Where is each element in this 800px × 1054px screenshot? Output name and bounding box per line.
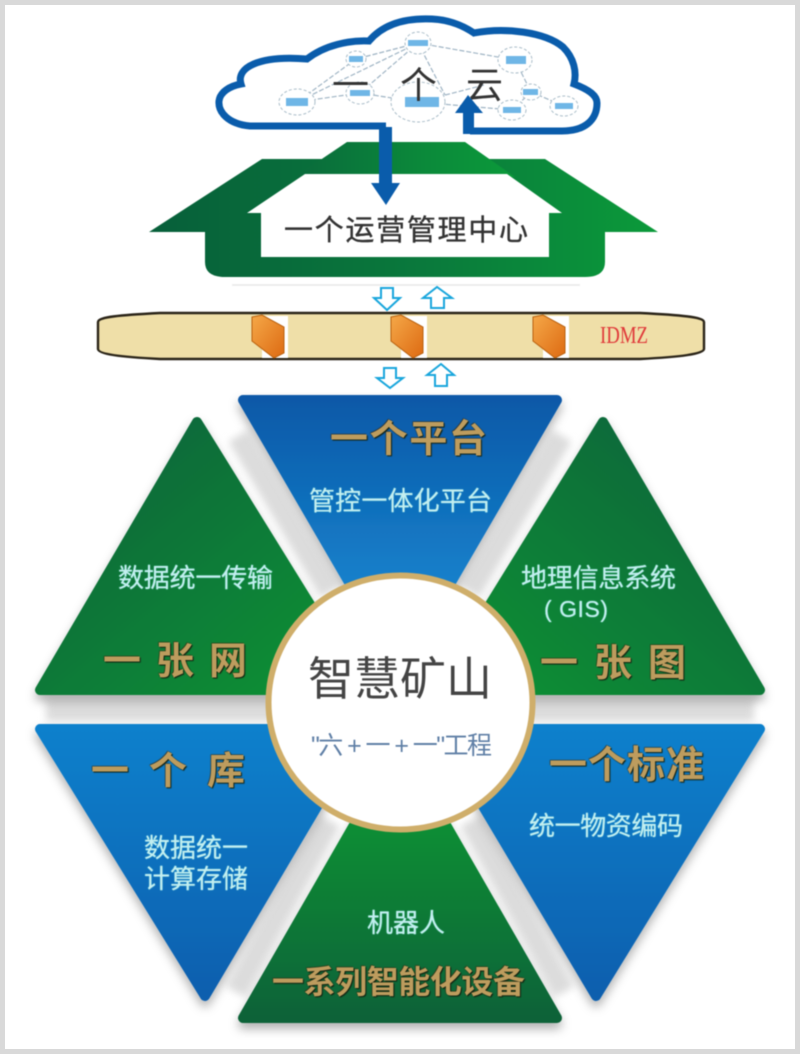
standard triangle bbox=[437, 729, 760, 996]
band: IDMZ bbox=[98, 313, 704, 359]
map heading: 一张图 bbox=[540, 643, 686, 685]
arrow: down to center bbox=[371, 127, 400, 205]
firewall 1 bbox=[252, 315, 288, 358]
house roof bbox=[295, 142, 515, 177]
cloud outline bbox=[219, 19, 597, 131]
database subtitle line 2: 计算存储 bbox=[144, 864, 248, 894]
panel: network bbox=[40, 422, 363, 690]
network triangle bbox=[40, 422, 363, 690]
equipment triangle bbox=[243, 745, 557, 1018]
network heading: 一张网 bbox=[103, 641, 247, 683]
panel: map bbox=[437, 422, 760, 690]
cloud links bbox=[297, 43, 564, 110]
house wings bbox=[149, 159, 658, 277]
center subtitle: "六 + 一 + 一"工程 bbox=[311, 732, 492, 760]
node devices bbox=[286, 40, 573, 113]
arrows: lower exchange bbox=[377, 364, 454, 388]
IDMZ label: IDMZ bbox=[600, 323, 648, 349]
database heading: 一个库 bbox=[91, 751, 245, 793]
panel: equipment bbox=[243, 745, 557, 1018]
center label: 一个运营管理中心 bbox=[284, 214, 528, 247]
center circle bbox=[268, 576, 532, 830]
panel: platform bbox=[243, 400, 557, 670]
platform subtitle: 管控一体化平台 bbox=[309, 486, 492, 516]
platform heading: 一个平台 bbox=[330, 419, 487, 461]
center title: 智慧矿山 bbox=[308, 653, 492, 705]
standard heading: 一个标准 bbox=[549, 745, 704, 787]
house: operations center bbox=[149, 127, 658, 277]
house interior bbox=[247, 174, 562, 257]
icon: cloud network bbox=[219, 19, 597, 134]
equipment heading: 一系列智能化设备 bbox=[272, 964, 525, 1000]
cloud title: 一 bbox=[332, 65, 369, 106]
cloud nodes bbox=[279, 32, 578, 122]
cloud title bbox=[332, 65, 503, 106]
standard subtitle: 统一物资编码 bbox=[529, 811, 683, 841]
band body bbox=[98, 313, 704, 359]
map subtitle GIS: ( GIS) bbox=[544, 596, 608, 622]
cloud title: 云 bbox=[466, 65, 503, 106]
database triangle bbox=[40, 729, 363, 996]
circle disc bbox=[268, 576, 532, 830]
equipment subtitle: 机器人 bbox=[367, 908, 445, 938]
arrow: up to cloud bbox=[455, 95, 483, 134]
firewall 2 bbox=[391, 315, 427, 358]
arrows: upper exchange bbox=[374, 287, 452, 310]
database subtitle: 数据统一 bbox=[144, 833, 248, 863]
panel: database bbox=[40, 729, 363, 996]
network subtitle: 数据统一传输 bbox=[118, 563, 273, 593]
map triangle bbox=[437, 422, 760, 690]
platform triangle bbox=[243, 400, 557, 670]
firewall 3 bbox=[533, 315, 569, 358]
panel: standard bbox=[437, 729, 760, 996]
map subtitle: 地理信息系统 bbox=[521, 563, 676, 593]
cloud title: 个 bbox=[400, 65, 437, 106]
